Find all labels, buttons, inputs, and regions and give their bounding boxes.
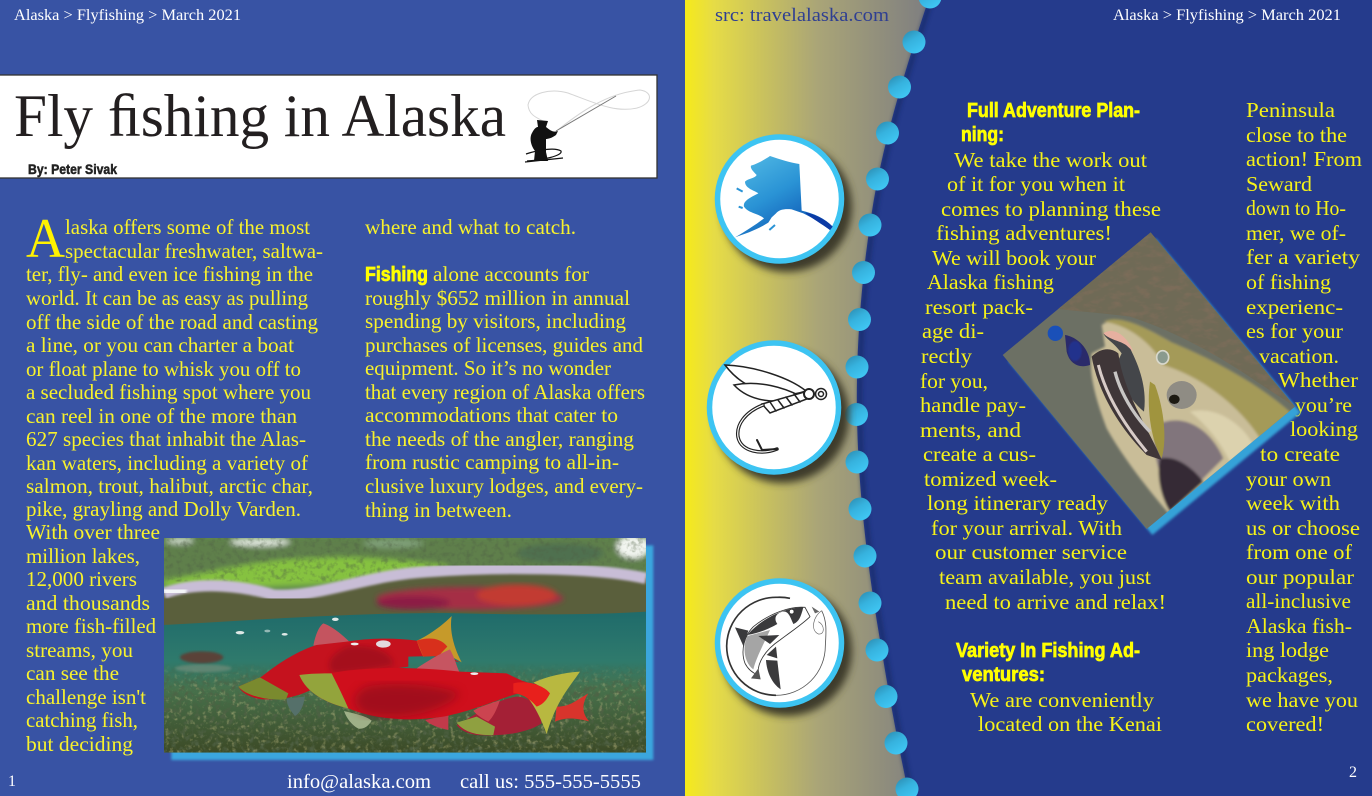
article text second column: equipment. So it’s no wonder <box>365 356 611 380</box>
article text far right column: ing lodge <box>1246 638 1329 662</box>
article text left column: 627 species that inhabit the Alas- <box>26 427 306 451</box>
article text left column: can see the <box>26 661 119 685</box>
article text right page centre column: create a cus- <box>923 442 1036 466</box>
article text right page centre column: tomized week- <box>924 467 1057 491</box>
article text far right column: to create <box>1260 442 1340 466</box>
heading: full adventure planning <box>961 100 1140 146</box>
article text far right column <box>1246 98 1362 736</box>
circle icon: leaping fish <box>718 581 852 716</box>
article text far right column: all-inclusive <box>1246 589 1351 613</box>
article text right page centre column: of it for you when it <box>947 172 1125 196</box>
water surface <box>164 568 646 595</box>
article text second column: spending by visitors, including <box>365 309 626 333</box>
article text right page centre column: age di- <box>922 319 984 343</box>
breadcrumb right: Alaska > Flyfishing > March 2021 <box>1113 7 1341 24</box>
byline: By: Peter Sivak <box>28 161 117 177</box>
article text right page centre column: rectly <box>921 344 973 368</box>
heading: variety in fishing adventures: ventures: <box>962 664 1045 686</box>
article text second column <box>365 215 645 522</box>
article text left column: pike, grayling and Dolly Varden. <box>26 497 301 521</box>
article text second column: that every region of Alaska offers <box>365 380 645 404</box>
bubbles <box>236 618 339 636</box>
highlighted word: Fishing <box>365 264 428 286</box>
article text far right column: experienc- <box>1246 295 1343 319</box>
article text right page centre column: need to arrive and relax! <box>945 590 1166 614</box>
article text far right column: of fishing <box>1246 270 1332 294</box>
heading: variety in fishing adventures: Variety In Fishing Ad- <box>956 640 1140 662</box>
article text left column: challenge isn't <box>26 685 146 709</box>
article text right page centre column: resort pack- <box>925 295 1033 319</box>
article text left column: off the side of the road and casting <box>26 310 318 334</box>
article text left column: can reel in one of the more than <box>26 404 298 428</box>
article text far right column: your own <box>1246 467 1332 491</box>
article text far right column: es for your <box>1246 319 1343 343</box>
article text right page centre column: handle pay- <box>920 393 1026 417</box>
article text far right column: you’re <box>1295 393 1352 417</box>
water <box>164 612 646 753</box>
article text far right column: from one of <box>1246 540 1352 564</box>
lure <box>1048 326 1090 366</box>
article text second column: from rustic camping to all-in- <box>365 450 619 474</box>
article text second column: purchases of licenses, guides and <box>365 333 643 357</box>
curved edge shadow <box>860 0 933 796</box>
article text right page centre column: We take the work out <box>954 148 1147 172</box>
rock texture <box>1053 232 1295 407</box>
article text second column: thing in between. <box>365 498 512 522</box>
article text right page centre column: We are conveniently <box>970 688 1155 712</box>
article text left column: and thousands <box>26 591 150 615</box>
photo: sockeye salmon underwater <box>164 535 653 760</box>
article text left column: ter, fly- and even ice fishing in the <box>26 262 313 286</box>
article text left column: or float plane to whisk you off to <box>26 357 301 381</box>
article text right page centre column: We will book your <box>932 246 1096 270</box>
article text far right column: down to Ho- <box>1246 196 1346 220</box>
article text left column: 12,000 rivers <box>26 567 137 591</box>
article text left column <box>26 208 323 756</box>
right page background with curved edge <box>857 0 1372 796</box>
article text left column: spectacular freshwater, saltwa- <box>65 239 323 263</box>
heading: variety in fishing adventures <box>956 640 1140 686</box>
page number 2: 2 <box>1349 764 1357 781</box>
lower jaw stripes <box>1092 349 1162 460</box>
fish head <box>1091 319 1292 515</box>
back fish <box>457 693 589 735</box>
article text left column: laska offers some of the most <box>65 215 310 239</box>
article text far right column: action! From <box>1246 147 1362 171</box>
contact email: info@alaska.com <box>287 771 431 793</box>
article text left column: salmon, trout, halibut, arctic char, <box>26 474 313 498</box>
circle icon: fishing fly <box>710 343 849 483</box>
left page background <box>0 0 686 796</box>
breadcrumb left: Alaska > Flyfishing > March 2021 <box>14 7 241 24</box>
article text left column: streams, you <box>26 638 133 662</box>
article text right page centre column: fishing adventures! <box>936 221 1112 245</box>
fish two <box>299 649 580 734</box>
article text far right column: week with <box>1246 491 1341 515</box>
article text far right column: Peninsula <box>1246 98 1336 122</box>
article text left column: a line, or you can charter a boat <box>26 333 294 357</box>
mirrored fish reflection <box>377 584 563 610</box>
article text left column: world. It can be as easy as pulling <box>26 286 308 310</box>
article text right page centre column: for your arrival. With <box>931 516 1123 540</box>
article text right page centre column: long itinerary ready <box>927 491 1109 515</box>
article text left column: a secluded fishing spot where you <box>26 380 311 404</box>
article text far right column: fer a variety <box>1246 245 1361 269</box>
photo: hooked salmon head, rotated diamond <box>990 225 1303 535</box>
article text far right column: us or choose <box>1246 516 1360 540</box>
heading: full adventure planning: Full Adventure Plan- <box>967 100 1140 122</box>
article text far right column: vacation. <box>1259 344 1339 368</box>
distant fish <box>180 651 223 663</box>
article text left column: With over three <box>26 520 160 544</box>
article text far right column: mer, we of- <box>1246 221 1346 245</box>
article text second column: accommodations that cater to <box>365 403 618 427</box>
reflection band <box>164 570 646 625</box>
article text second column: where and what to catch. <box>365 215 576 239</box>
title banner <box>0 75 657 178</box>
source credit: src: travelalaska.com <box>715 5 889 26</box>
article text far right column: covered! <box>1246 712 1324 736</box>
article text right page centre column: Alaska fishing <box>927 270 1055 294</box>
article text second column: clusive luxury lodges, and every- <box>365 474 643 498</box>
beaded dots along the edge <box>845 0 942 796</box>
article text right page centre column: team available, you just <box>939 565 1151 589</box>
article text left column: kan waters, including a variety of <box>26 451 308 475</box>
article text left column: million lakes, <box>26 544 140 568</box>
article text far right column: close to the <box>1246 123 1347 147</box>
gradient band between pages <box>685 0 945 796</box>
article text right page centre column: for you, <box>920 369 988 393</box>
fish one <box>238 616 462 716</box>
sky and trees <box>164 535 650 587</box>
article text right page centre column: located on the Kenai <box>978 712 1162 736</box>
article text second column: alone accounts for <box>433 262 589 286</box>
article text far right column: Whether <box>1278 368 1358 392</box>
circle icon: Alaska map <box>718 137 852 272</box>
article text second column: the needs of the angler, ranging <box>365 427 634 451</box>
eye <box>1157 351 1169 364</box>
article text far right column: our popular <box>1246 565 1354 589</box>
article text right page centre column <box>920 100 1166 736</box>
article text far right column: Alaska fish- <box>1246 614 1352 638</box>
article text right page centre column: comes to planning these <box>941 197 1161 221</box>
contact phone: call us: 555-555-5555 <box>460 771 641 793</box>
article text left column: but deciding <box>26 732 134 756</box>
article text left column: catching fish, <box>26 708 138 732</box>
article text right page centre column: ments, and <box>920 418 1022 442</box>
title: Fly ﬁshing in Alaska <box>14 83 506 149</box>
drop cap: A <box>26 208 66 270</box>
open mouth <box>1103 332 1145 412</box>
page number 1: 1 <box>8 773 16 790</box>
icon: fly fisherman <box>525 90 649 162</box>
heading: full adventure planning: ning: <box>961 124 1004 146</box>
article text far right column: looking <box>1290 417 1359 441</box>
article text second column: roughly $652 million in annual <box>365 286 630 310</box>
article text far right column: packages, <box>1246 663 1333 687</box>
article text right page centre column: our customer service <box>935 540 1127 564</box>
article text far right column: Seward <box>1246 172 1313 196</box>
article text left column: more fish-filled <box>26 614 156 638</box>
article text far right column: we have you <box>1246 688 1359 712</box>
